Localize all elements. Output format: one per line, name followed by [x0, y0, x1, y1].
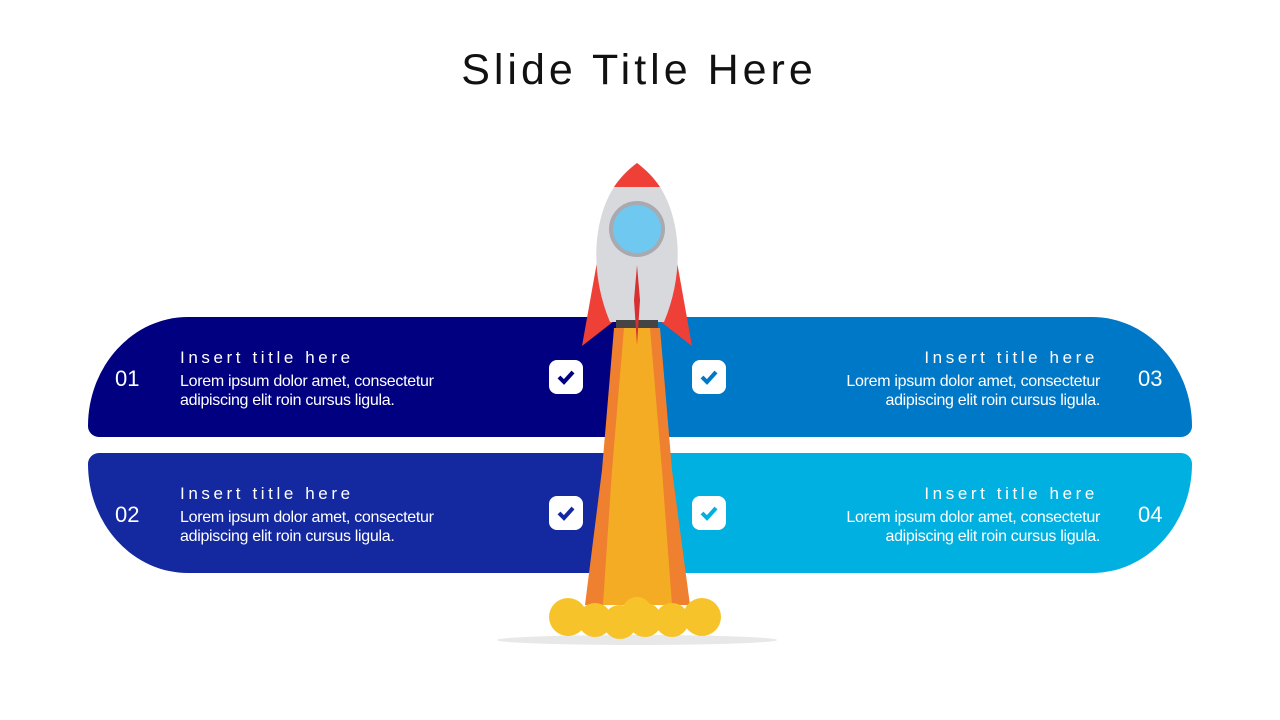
title: Slide Title Here — [461, 46, 817, 94]
text 01: Lorem ipsum dolor amet, consectetur — [180, 373, 434, 390]
check icon 02 — [549, 496, 583, 530]
title 04: Insert title here — [924, 484, 1098, 503]
text 02: adipiscing elit roin cursus ligula. — [180, 528, 395, 545]
text 03: adipiscing elit roin cursus ligula. — [885, 392, 1100, 409]
flame — [549, 328, 721, 639]
panel 02 — [88, 453, 648, 573]
text 04: adipiscing elit roin cursus ligula. — [885, 528, 1100, 545]
check icon 03 — [692, 360, 726, 394]
text 01 — [180, 373, 434, 409]
number 03: 03 — [1138, 366, 1162, 391]
panel 04 — [632, 453, 1192, 573]
check icon 01 — [549, 360, 583, 394]
title 01: Insert title here — [180, 348, 354, 367]
title 03: Insert title here — [924, 348, 1098, 367]
title 02: Insert title here — [180, 484, 354, 503]
text 03 — [846, 373, 1100, 409]
number 04: 04 — [1138, 502, 1162, 527]
text 04: Lorem ipsum dolor amet, consectetur — [846, 509, 1100, 526]
text 04 — [846, 509, 1100, 545]
text 03: Lorem ipsum dolor amet, consectetur — [846, 373, 1100, 390]
panel 03 — [632, 317, 1192, 437]
text 02 — [180, 509, 434, 545]
check icon 04 — [692, 496, 726, 530]
panel 01 — [88, 317, 648, 437]
text 01: adipiscing elit roin cursus ligula. — [180, 392, 395, 409]
number 01: 01 — [115, 366, 139, 391]
number 02: 02 — [115, 502, 139, 527]
text 02: Lorem ipsum dolor amet, consectetur — [180, 509, 434, 526]
rocket body — [582, 163, 692, 346]
